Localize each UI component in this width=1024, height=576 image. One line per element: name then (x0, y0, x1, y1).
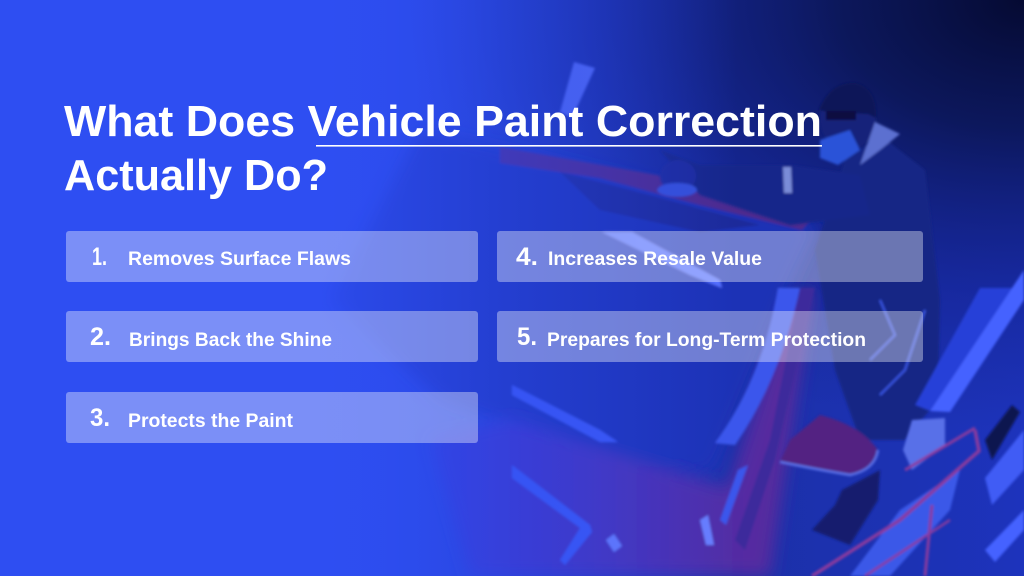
item 5: prepares for long-term protection (497, 311, 923, 362)
ladder and right side equipment (812, 270, 1024, 576)
title: Actually Do? (64, 151, 328, 200)
item 2: brings back the shine: Brings Back the Shine (129, 330, 332, 351)
car body and windshield (330, 62, 822, 576)
item 4: increases resale value: 4. (516, 243, 538, 271)
side mirror (780, 415, 878, 475)
item 4: increases resale value: Increases Resale Value (548, 249, 762, 270)
item 3: protects the paint: Protects the Paint (128, 411, 294, 432)
item 3: protects the paint (66, 392, 478, 443)
shoe (812, 470, 880, 545)
technician (657, 83, 940, 545)
item 1: removes surface flaws: Removes Surface Flaws (128, 249, 351, 270)
item 4: increases resale value (497, 231, 923, 282)
item 2: brings back the shine: 2. (90, 323, 111, 351)
item 1: removes surface flaws (66, 231, 478, 282)
item 5: prepares for long-term protection: 5. (517, 323, 537, 351)
item 3: protects the paint: 3. (90, 404, 110, 432)
item 5: prepares for long-term protection: Prepares for Long-Term Protection (547, 330, 866, 351)
title: What Does Vehicle Paint Correction (64, 97, 822, 146)
item 1: removes surface flaws: 1. (92, 243, 107, 271)
item 2: brings back the shine (66, 311, 478, 362)
title (64, 97, 822, 200)
